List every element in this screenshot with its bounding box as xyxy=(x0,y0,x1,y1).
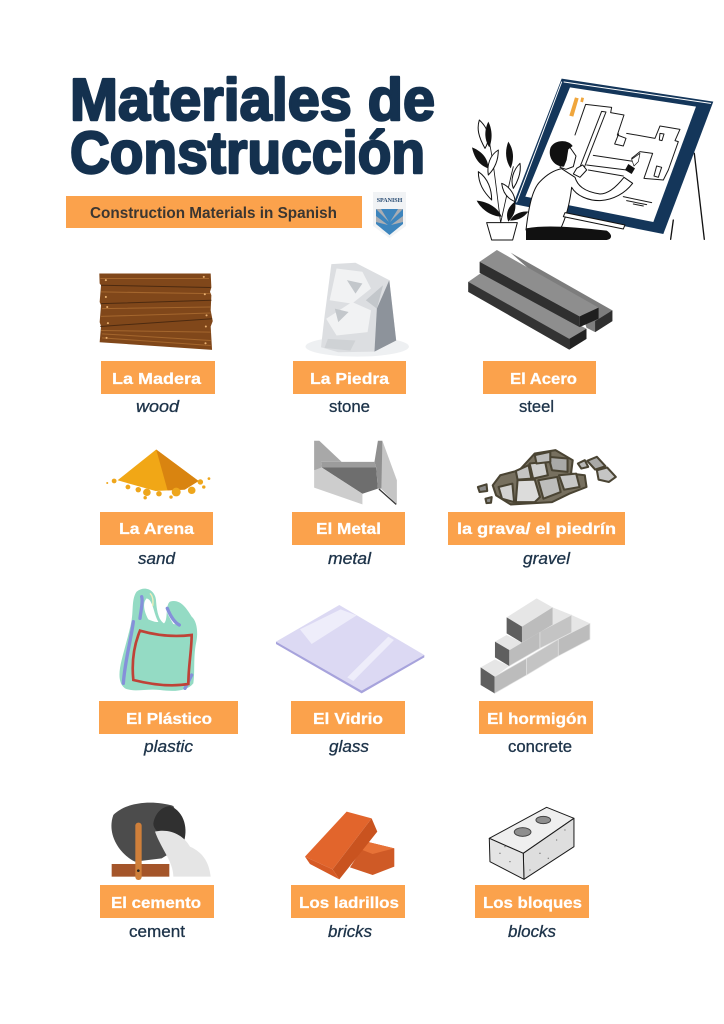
middle row xyxy=(509,615,572,666)
card: steel xyxy=(468,250,612,416)
label xyxy=(475,885,589,918)
card: gravel xyxy=(448,450,625,568)
icon: plastic bag xyxy=(119,589,197,691)
icon: bricks xyxy=(305,812,394,879)
title: Materiales de xyxy=(70,67,435,133)
icon: stone xyxy=(306,263,409,357)
label xyxy=(291,885,405,918)
card: wood: La Madera xyxy=(112,371,201,388)
label xyxy=(99,701,238,734)
card: glass xyxy=(276,605,424,756)
icon: steel bars xyxy=(468,250,612,350)
translation: concrete xyxy=(508,738,572,756)
card: stone: La Piedra xyxy=(310,371,389,388)
translation: gravel xyxy=(523,550,571,568)
icon: concrete blocks xyxy=(481,598,590,693)
card: gravel: la grava/ el piedrín xyxy=(457,521,616,538)
title: Construcción xyxy=(70,120,425,186)
card: blocks: Los bloques xyxy=(483,895,582,912)
orange marks xyxy=(569,97,579,117)
card: cement xyxy=(100,803,214,941)
card: wood xyxy=(99,273,215,416)
icon: wood planks xyxy=(99,273,213,350)
label xyxy=(100,885,214,918)
icon: gravel pile xyxy=(478,450,616,504)
subtitle banner xyxy=(66,196,362,228)
title xyxy=(70,67,435,186)
bottom row xyxy=(495,623,590,693)
label xyxy=(100,512,213,545)
illustration: architect at drafting board xyxy=(472,79,713,240)
card: stone xyxy=(293,263,409,416)
card: sand: La Arena xyxy=(119,521,194,538)
icon: school logo shield xyxy=(373,192,406,238)
translation: stone xyxy=(329,398,370,416)
card: sand xyxy=(100,449,213,568)
label xyxy=(293,361,406,394)
label xyxy=(448,512,625,545)
card: blocks xyxy=(475,807,589,941)
desk ledge xyxy=(563,213,625,229)
card: cement: El cemento xyxy=(111,895,201,912)
translation: cement xyxy=(129,923,185,941)
card: bricks xyxy=(291,812,405,941)
label xyxy=(101,361,215,394)
subtitle banner: Construction Materials in Spanish xyxy=(90,205,337,222)
translation: glass xyxy=(329,738,369,756)
icon: cinder block xyxy=(489,807,574,879)
icon: metal beam xyxy=(314,441,397,504)
label xyxy=(479,701,593,734)
translation: sand xyxy=(138,550,176,568)
plant xyxy=(487,133,513,223)
card: concrete xyxy=(479,598,593,756)
translation: steel xyxy=(519,398,554,416)
floor plan lines xyxy=(575,104,680,206)
translation: blocks xyxy=(508,923,556,941)
label xyxy=(292,512,405,545)
translation: bricks xyxy=(328,923,372,941)
translation: metal xyxy=(328,550,372,568)
label xyxy=(483,361,596,394)
icon: school logo shield: SPANISH xyxy=(377,198,403,204)
icon: glass sheet xyxy=(276,605,424,693)
card: concrete: El hormigón xyxy=(487,711,587,728)
top block xyxy=(507,598,553,627)
card: metal: El Metal xyxy=(316,521,381,538)
card: bricks: Los ladrillos xyxy=(299,895,399,912)
card: steel: El Acero xyxy=(510,371,577,388)
label xyxy=(291,701,405,734)
icon: cement barrel xyxy=(111,803,211,880)
drafting board xyxy=(513,79,713,234)
easel legs xyxy=(671,153,704,239)
card: metal xyxy=(292,441,405,568)
translation: wood xyxy=(136,398,180,416)
translation: plastic xyxy=(143,738,194,756)
plant pot xyxy=(487,223,517,240)
icon: sand pile xyxy=(106,449,210,499)
person xyxy=(526,169,633,230)
card: plastic xyxy=(99,589,238,756)
card: glass: El Vidrio xyxy=(313,711,383,728)
card: plastic: El Plástico xyxy=(126,711,212,728)
